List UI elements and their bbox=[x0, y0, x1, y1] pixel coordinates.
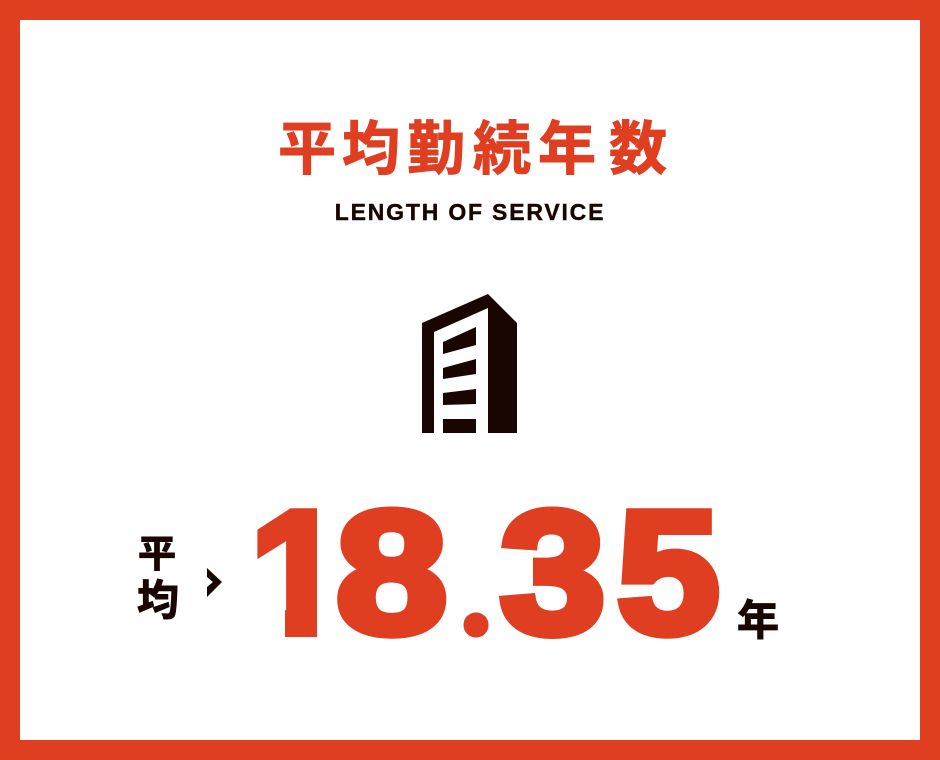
value: 18.35: 8 bbox=[336, 475, 447, 670]
title: Japanese heading: 平均勤続年数 bbox=[278, 117, 667, 182]
unit: years: 年 bbox=[737, 597, 779, 644]
icon: office building bbox=[422, 294, 517, 433]
icon: chevron arrow bbox=[207, 568, 222, 597]
value: 18.35: . bbox=[452, 479, 500, 674]
value: 18.35: 3 bbox=[500, 475, 605, 670]
subtitle: English heading: LENGTH OF SERVICE bbox=[335, 199, 605, 225]
label: average (vertical): 平 bbox=[138, 534, 176, 576]
label: average (vertical): 均 bbox=[137, 577, 179, 624]
value: 18.35 bbox=[257, 506, 720, 639]
value: 18.35: 5 bbox=[617, 475, 720, 669]
value: 18.35: 1 bbox=[250, 474, 347, 670]
